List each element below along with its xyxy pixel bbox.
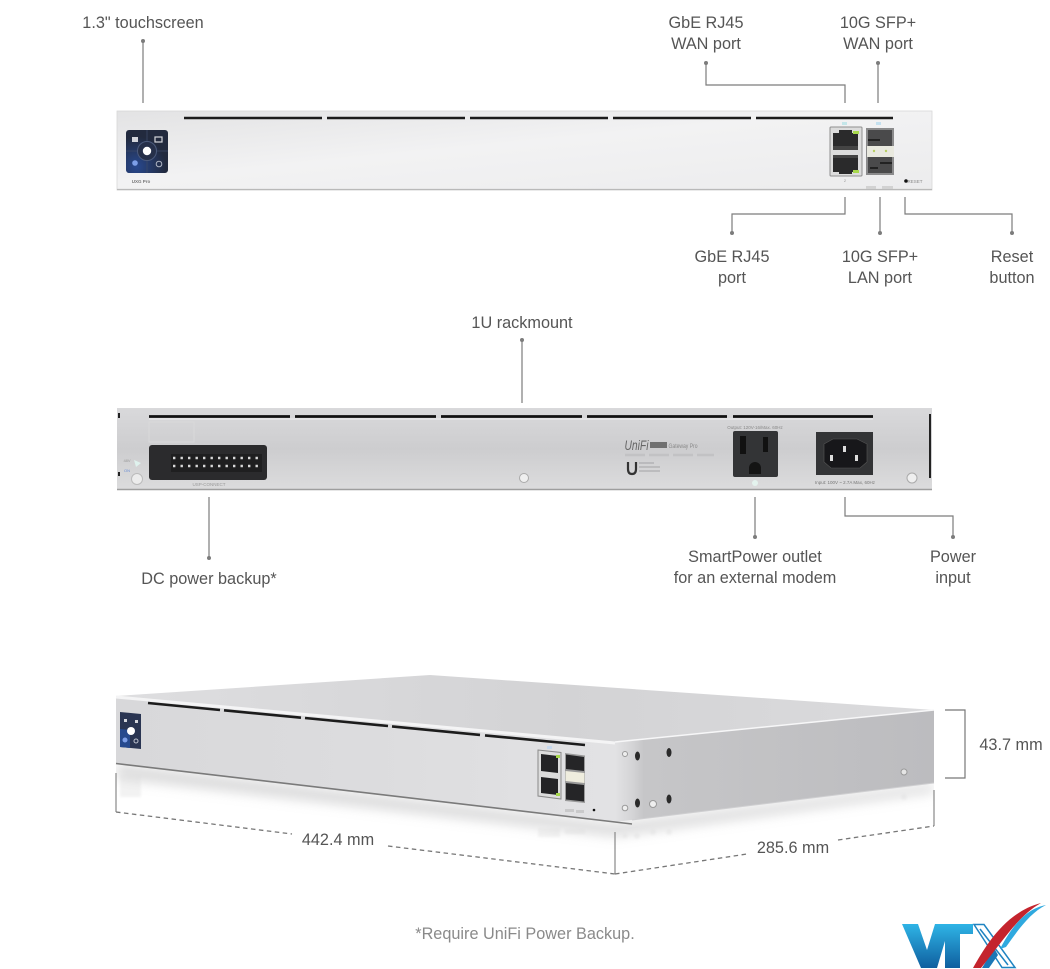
- label: 1U rackmount: 1U rackmount: [471, 314, 573, 332]
- icon: touchscreen: [120, 712, 141, 749]
- label: GbE RJ45 port: [695, 197, 845, 287]
- product label: [624, 437, 714, 474]
- faint reflections: [120, 775, 907, 839]
- dimension: depth: [615, 790, 934, 874]
- label: Power input: Power: [930, 548, 977, 566]
- label: Power input: input: [935, 569, 971, 587]
- label: 10G SFP+ WAN port: 10G SFP+: [840, 14, 916, 32]
- label: 10G SFP+ LAN port: LAN port: [848, 269, 913, 287]
- footnote: *Require UniFi Power Backup.: [415, 925, 635, 943]
- label: SmartPower outlet: SmartPower outlet: [688, 548, 822, 566]
- screw: [907, 473, 917, 483]
- panel: rear view device: [117, 408, 932, 490]
- label: 1U rackmount: [471, 314, 573, 403]
- icon: SmartPower outlet: Output: 120V-16/Max. 60Hz: [727, 425, 784, 430]
- icon: power input: Input: 100V ~ 2.7A Max, 60Hz: [815, 480, 876, 485]
- dimension: width: 442.4 mm: [302, 831, 374, 849]
- rear LEDs: ON: [124, 468, 130, 473]
- screw: [520, 474, 528, 482]
- dimension: height: 43.7 mm: [979, 736, 1043, 754]
- icon: RJ45 ports: 2: [844, 178, 847, 183]
- label: GbE RJ45 port: port: [718, 269, 746, 287]
- reset button: RESET: [907, 179, 923, 184]
- label: 10G SFP+ LAN port: 10G SFP+: [842, 248, 918, 266]
- label: 1.3" touchscreen: [82, 14, 204, 103]
- icon: SFP+ ports: [565, 753, 585, 813]
- dimension: width: [116, 773, 615, 874]
- icon: RJ45 ports: [830, 122, 862, 183]
- rear side holes: [622, 748, 907, 811]
- icon: power input: [815, 432, 876, 485]
- label: 10G SFP+ WAN port: [840, 14, 916, 103]
- icon: touchscreen: [126, 130, 168, 173]
- label: GbE RJ45 WAN port: [669, 14, 845, 103]
- reset button: [593, 809, 595, 811]
- label: 10G SFP+ WAN port: WAN port: [843, 35, 913, 53]
- text: connector label: USP-CONNECT: [192, 482, 226, 487]
- rear LEDs: 48V: [123, 458, 131, 463]
- label: 1.3" touchscreen: 1.3" touchscreen: [82, 14, 204, 32]
- icon: RJ45 ports: [538, 746, 561, 799]
- label: Reset button: [905, 197, 1035, 287]
- icon: DC connector: [149, 445, 267, 480]
- product label: UniFi: [624, 437, 649, 453]
- label: SmartPower outlet: for an external modem: [674, 569, 836, 587]
- panel: perspective device: [116, 675, 934, 839]
- label: Reset button: button: [989, 269, 1035, 287]
- dimension: depth: 285.6 mm: [757, 839, 829, 857]
- rear LEDs: [123, 458, 142, 484]
- label: GbE RJ45 WAN port: WAN port: [671, 35, 741, 53]
- dimension: height: [945, 710, 1043, 778]
- text: model name: UXG Pro: [132, 179, 150, 184]
- label: GbE RJ45 WAN port: GbE RJ45: [669, 14, 743, 32]
- logo: VTX: [902, 903, 1046, 968]
- label: DC power backup: DC power backup*: [141, 570, 277, 588]
- label: GbE RJ45 port: GbE RJ45: [695, 248, 769, 266]
- icon: SFP+ ports: [866, 122, 894, 189]
- label: 10G SFP+ LAN port: [842, 197, 918, 287]
- label: DC power backup: [141, 497, 277, 588]
- panel: front view device: [117, 111, 932, 190]
- product label: Gateway Pro: [668, 443, 698, 450]
- label: SmartPower outlet: [674, 497, 836, 587]
- label: Power input: [845, 497, 977, 587]
- icon: SmartPower outlet: [727, 425, 784, 486]
- label: Reset button: Reset: [991, 248, 1034, 266]
